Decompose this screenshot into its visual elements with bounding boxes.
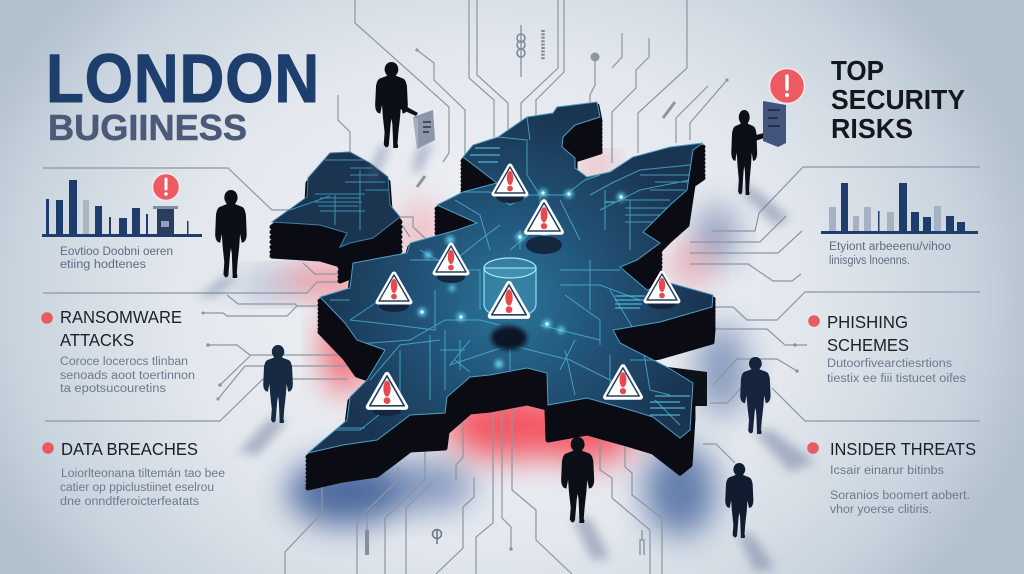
subtitle: BUGIINESS xyxy=(48,107,247,148)
risk: insider threats: Soranios boomert aobert. xyxy=(830,490,970,502)
stripe details on the map xyxy=(470,148,690,415)
alert sign xyxy=(606,367,640,397)
risk: ransomware attacks: ATTACKS xyxy=(60,330,134,350)
risk: insider threats: INSIDER THREATS xyxy=(830,439,976,459)
bar chart: right xyxy=(821,183,978,234)
risk: data breaches: Loiorlteonana tiltemán tao bee xyxy=(61,468,225,480)
icon: server with alert xyxy=(152,174,180,235)
alert sign xyxy=(494,166,526,194)
chart caption: right: linisgivs lnoenns. xyxy=(829,255,910,267)
risk: insider threats: vhor yoerse clitiris. xyxy=(830,504,932,516)
alert sign xyxy=(369,375,405,407)
heading: top security risks: SECURITY xyxy=(831,84,965,115)
risk: ransomware attacks xyxy=(41,307,195,395)
map circuit traces xyxy=(315,117,690,430)
map: left region xyxy=(272,152,400,281)
alert sign xyxy=(527,202,561,232)
person: right xyxy=(740,357,771,434)
risk: phishing schemes: PHISHING xyxy=(827,312,908,332)
risk: insider threats: Icsair einarur bitinbs xyxy=(830,465,944,477)
person: lower right xyxy=(725,463,753,538)
chart caption: left xyxy=(60,246,173,271)
heading: top security risks: TOP xyxy=(831,55,884,86)
map: main region xyxy=(308,102,713,488)
pedestals under alert signs xyxy=(373,191,676,416)
person: bottom centre xyxy=(561,437,594,523)
risk: ransomware attacks: RANSOMWARE xyxy=(60,307,182,327)
bar chart: left xyxy=(42,174,202,237)
heading: top security risks xyxy=(831,55,965,144)
risk: phishing schemes xyxy=(808,312,966,385)
chart caption: left: etiing hodtenes xyxy=(60,259,146,271)
title: London: LONDON xyxy=(46,40,320,117)
person: top centre with briefcase xyxy=(375,62,435,149)
risk: data breaches: dne onndtferoicterfeatats xyxy=(60,496,199,508)
person shadows xyxy=(196,142,815,572)
chart caption: right xyxy=(829,241,951,267)
risk: data breaches: DATA BREACHES xyxy=(61,439,198,459)
alert sign: centre xyxy=(491,284,527,316)
central data cylinder xyxy=(484,258,536,318)
risk: insider threats xyxy=(807,439,976,516)
risk: phishing schemes: tiestix ee fiii tistucet oifes xyxy=(827,373,966,385)
chart caption: left: Eovtioo Doobni oeren xyxy=(60,246,173,258)
person: left xyxy=(215,190,247,278)
risk: data breaches xyxy=(42,439,225,508)
alert sign xyxy=(378,274,410,302)
alert sign xyxy=(435,245,467,273)
risk: phishing schemes: SCHEMES xyxy=(827,335,909,355)
glowing nodes xyxy=(418,189,625,368)
map: dark block at lower right xyxy=(668,367,707,406)
soft red and blue glows under the map xyxy=(235,158,748,536)
risk: data breaches: catier op ppiclustiinet eselrou xyxy=(60,482,214,494)
circuit decorations: nodes and small components xyxy=(202,25,799,555)
risk: ransomware attacks: senoads aoot toertinnon xyxy=(60,370,195,382)
chart caption: right: Etyiont arbeeenu/vihoo xyxy=(829,241,951,253)
risk: ransomware attacks: Coroce locerocs tlinban xyxy=(60,356,188,368)
heading: top security risks: RISKS xyxy=(831,113,913,144)
person: top right with alert box xyxy=(731,68,804,195)
person: lower left xyxy=(263,345,293,423)
risk: phishing schemes: Dutoorfivearctiesrtions xyxy=(827,358,952,370)
alert sign xyxy=(646,273,678,301)
risk: ransomware attacks: ta epotsucouretins xyxy=(60,383,166,395)
